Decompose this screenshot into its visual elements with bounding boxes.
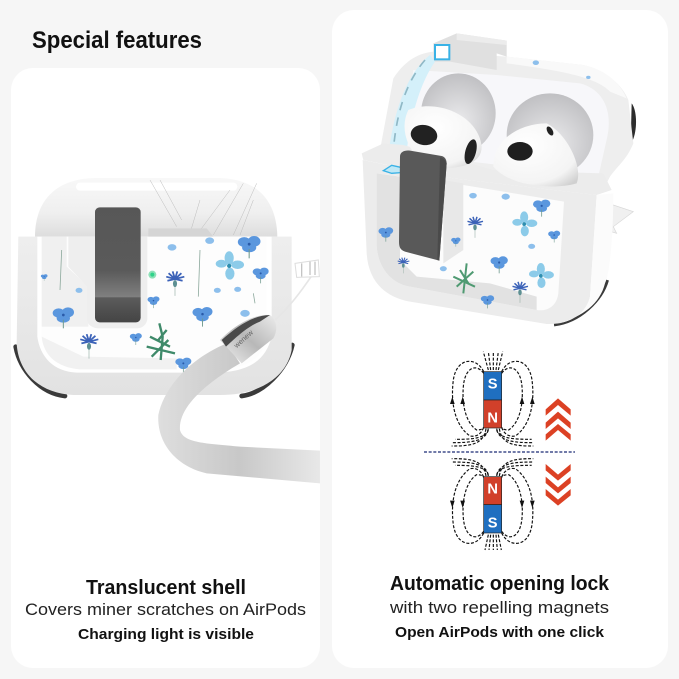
lid back xyxy=(380,52,633,190)
caption: translucent shell xyxy=(25,577,306,643)
hinge top xyxy=(433,33,507,70)
panel: translucent shell xyxy=(11,68,320,668)
top magnet: S xyxy=(488,376,498,392)
lock clip xyxy=(399,151,447,261)
lid inner xyxy=(400,70,609,177)
case body xyxy=(363,160,597,324)
black side buttons xyxy=(631,103,636,144)
heading: special features: Special features xyxy=(32,27,202,54)
bottom magnet xyxy=(484,477,502,533)
clip frame xyxy=(68,237,147,328)
strap metal clasp xyxy=(220,315,276,363)
strap xyxy=(158,343,320,483)
caption: translucent shell: Charging light is visible xyxy=(78,626,254,643)
floral print xyxy=(41,236,269,373)
caption: automatic opening lock xyxy=(389,573,610,641)
arrows down xyxy=(546,464,571,506)
magnet diagram xyxy=(424,352,575,550)
caption: translucent shell: Translucent shell xyxy=(86,577,246,599)
top field arrows xyxy=(450,397,535,404)
top magnet xyxy=(484,372,502,428)
caption: automatic opening lock: Automatic opening lock xyxy=(390,573,610,595)
lock clip xyxy=(95,207,141,322)
separation line xyxy=(424,450,575,454)
bottom magnet: N xyxy=(487,481,498,497)
black bumpers xyxy=(16,345,292,396)
right earbud xyxy=(493,123,578,186)
product: open case with earbuds xyxy=(362,33,636,325)
transparent window xyxy=(377,173,564,310)
strap loop xyxy=(598,205,633,233)
panel: automatic opening lock xyxy=(332,10,668,668)
caption: automatic opening lock: Open AirPods with one click xyxy=(395,624,605,641)
arrows up xyxy=(546,398,571,441)
top field lines xyxy=(452,352,533,446)
strap metal logo: wenew xyxy=(231,327,255,350)
floral print xyxy=(378,193,560,308)
strap loop xyxy=(295,260,319,277)
bottom field lines xyxy=(452,459,533,550)
case body xyxy=(17,237,292,395)
bottom field arrows xyxy=(450,501,535,508)
earbud cups xyxy=(421,73,496,153)
charging light xyxy=(148,271,156,279)
caption: automatic opening lock: with two repelling magnets xyxy=(389,598,609,617)
magnet blue square lower xyxy=(383,165,401,173)
top floral strip xyxy=(533,60,591,79)
base rim plate xyxy=(362,143,612,195)
magnet blue square upper xyxy=(435,45,449,59)
caption: translucent shell: Covers miner scratches on AirPods xyxy=(25,600,306,619)
product: closed case with strap xyxy=(16,178,320,483)
transparent window xyxy=(42,237,267,369)
top magnet: N xyxy=(487,411,498,427)
case lid xyxy=(35,178,277,237)
magnetic field band xyxy=(387,55,435,170)
left earbud xyxy=(405,106,482,168)
bottom magnet: S xyxy=(488,515,498,531)
